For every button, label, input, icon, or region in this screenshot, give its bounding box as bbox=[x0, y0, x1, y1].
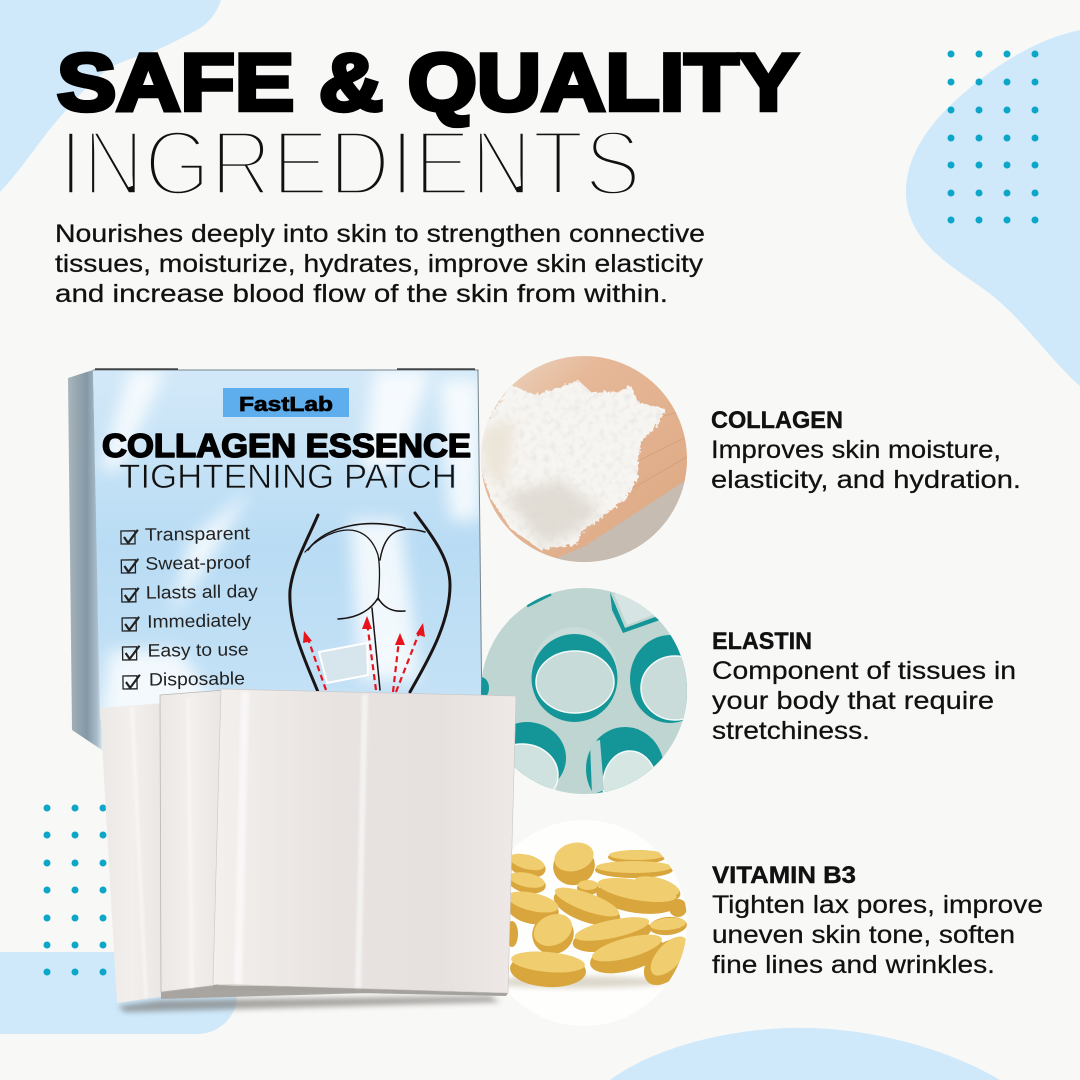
brand label: FastLab bbox=[239, 394, 333, 416]
dot grid: bottom left bbox=[44, 804, 106, 976]
ingredient text: elastin: ELASTIN bbox=[712, 628, 812, 655]
ingredient text: collagen: elasticity, and hydration. bbox=[711, 466, 1021, 494]
patch 2 bbox=[160, 690, 225, 992]
title: INGREDIENTS bbox=[59, 111, 641, 215]
ingredient text: vitamin b3: fine lines and wrinkles. bbox=[712, 951, 995, 979]
transparent patch on leg bbox=[319, 643, 368, 683]
feature checklist: Easy to use bbox=[147, 639, 249, 661]
ingredient text: vitamin b3: VITAMIN B3 bbox=[712, 862, 856, 889]
feature checklist: Disposable bbox=[149, 668, 245, 690]
brand label bbox=[223, 388, 349, 417]
ingredient text: elastin bbox=[712, 628, 1016, 745]
ingredient photo: collagen powder bbox=[478, 355, 690, 565]
ingredient photo: vitamin tablets bbox=[508, 842, 687, 990]
gel drop bbox=[531, 627, 618, 722]
patch 1 bbox=[100, 703, 165, 1003]
intro paragraph: and increase blood flow of the skin from within. bbox=[55, 280, 668, 308]
patch 3 bbox=[213, 689, 516, 993]
intro paragraph: tissues, moisturize, hydrates, improve skin elasticity bbox=[55, 250, 704, 278]
title bbox=[57, 38, 798, 215]
ingredient text: collagen: Improves skin moisture, bbox=[711, 436, 1001, 464]
box title: TIGHTENING PATCH bbox=[119, 458, 457, 496]
body illustration bbox=[290, 513, 450, 692]
adhesive patches bbox=[100, 689, 516, 1012]
ingredient text: elastin: Component of tissues in bbox=[712, 657, 1016, 685]
dot grid: top right bbox=[948, 50, 1038, 224]
feature checklist: Sweat-proof bbox=[145, 552, 252, 574]
ingredient text: elastin: your body that require bbox=[712, 687, 994, 715]
red arrows bbox=[307, 622, 421, 692]
feature checklist: Immediately bbox=[147, 610, 251, 632]
ingredient text: collagen bbox=[711, 407, 1021, 494]
intro paragraph: Nourishes deeply into skin to strengthen connective bbox=[55, 220, 705, 248]
feature checklist bbox=[121, 523, 259, 690]
title: SAFE & QUALITY bbox=[57, 38, 798, 128]
box title: COLLAGEN ESSENCE bbox=[102, 427, 471, 464]
box title bbox=[102, 427, 471, 496]
ingredient text: vitamin b3: Tighten lax pores, improve bbox=[712, 891, 1043, 919]
ingredient text: vitamin b3 bbox=[712, 862, 1043, 979]
feature checklist: Llasts all day bbox=[146, 581, 258, 603]
gel drop bbox=[586, 727, 662, 794]
feature checklist: Transparent bbox=[145, 523, 250, 545]
intro paragraph bbox=[55, 220, 705, 308]
product box bbox=[68, 368, 485, 750]
gel drop bbox=[514, 722, 566, 790]
ingredient photo: elastin gel drops bbox=[481, 588, 687, 794]
gel drop bbox=[630, 635, 687, 723]
ingredient text: collagen: COLLAGEN bbox=[711, 407, 843, 434]
box front bbox=[90, 368, 485, 723]
ingredient text: vitamin b3: uneven skin tone, soften bbox=[712, 921, 1015, 949]
ingredient text: elastin: stretchiness. bbox=[712, 717, 870, 745]
box side bbox=[68, 370, 102, 750]
